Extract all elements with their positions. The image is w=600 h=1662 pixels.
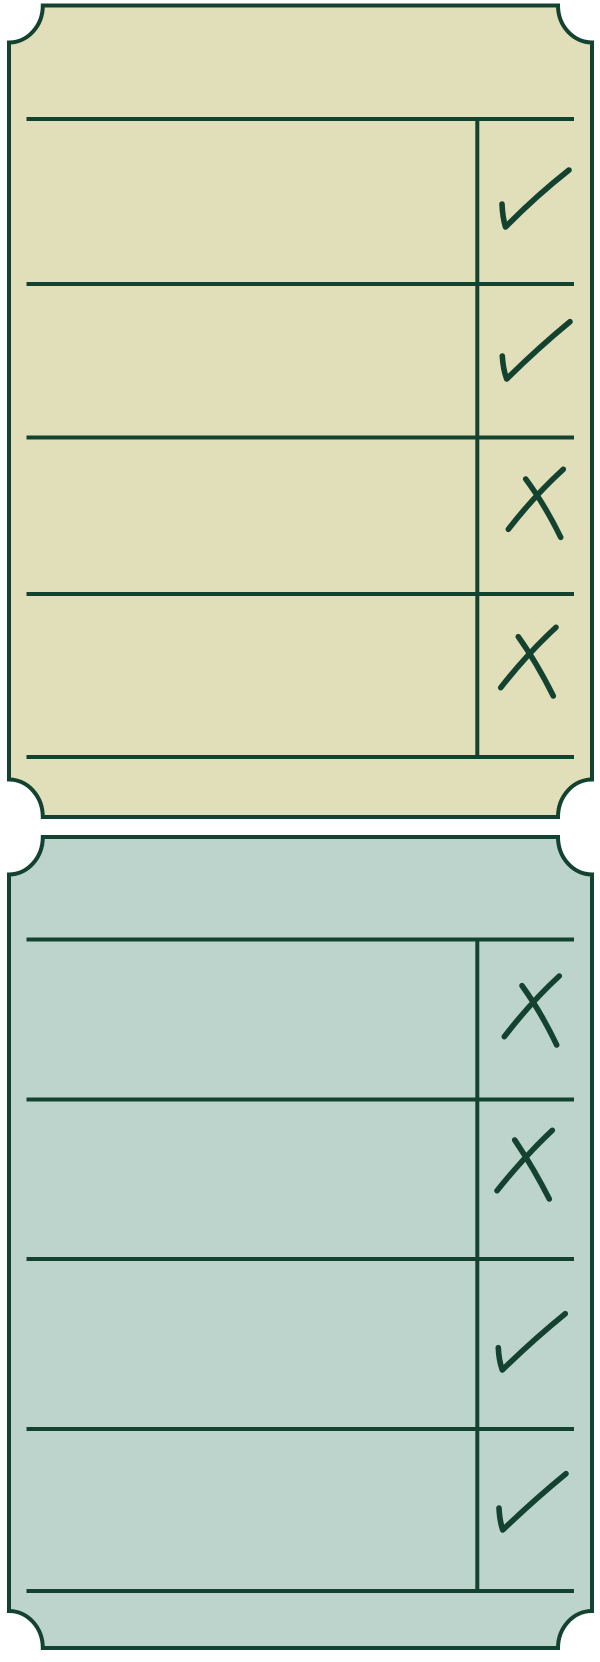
panel: bottom card (9, 837, 592, 1648)
icon: check row 2 (502, 322, 570, 379)
table rules: bottom card (26, 940, 574, 1591)
table rules: top card (26, 119, 574, 757)
icon: cross row 2 (497, 1130, 552, 1199)
icon: check row 4 (499, 1474, 566, 1530)
card shape: bottom (9, 837, 592, 1648)
icon: check row 3 (498, 1314, 565, 1370)
icon: cross row 1 (504, 976, 559, 1045)
panel: top card (9, 6, 592, 817)
card shape: top (9, 6, 592, 817)
icon: check row 1 (502, 170, 569, 227)
icon: cross row 4 (501, 627, 556, 696)
icon: cross row 3 (508, 469, 563, 537)
